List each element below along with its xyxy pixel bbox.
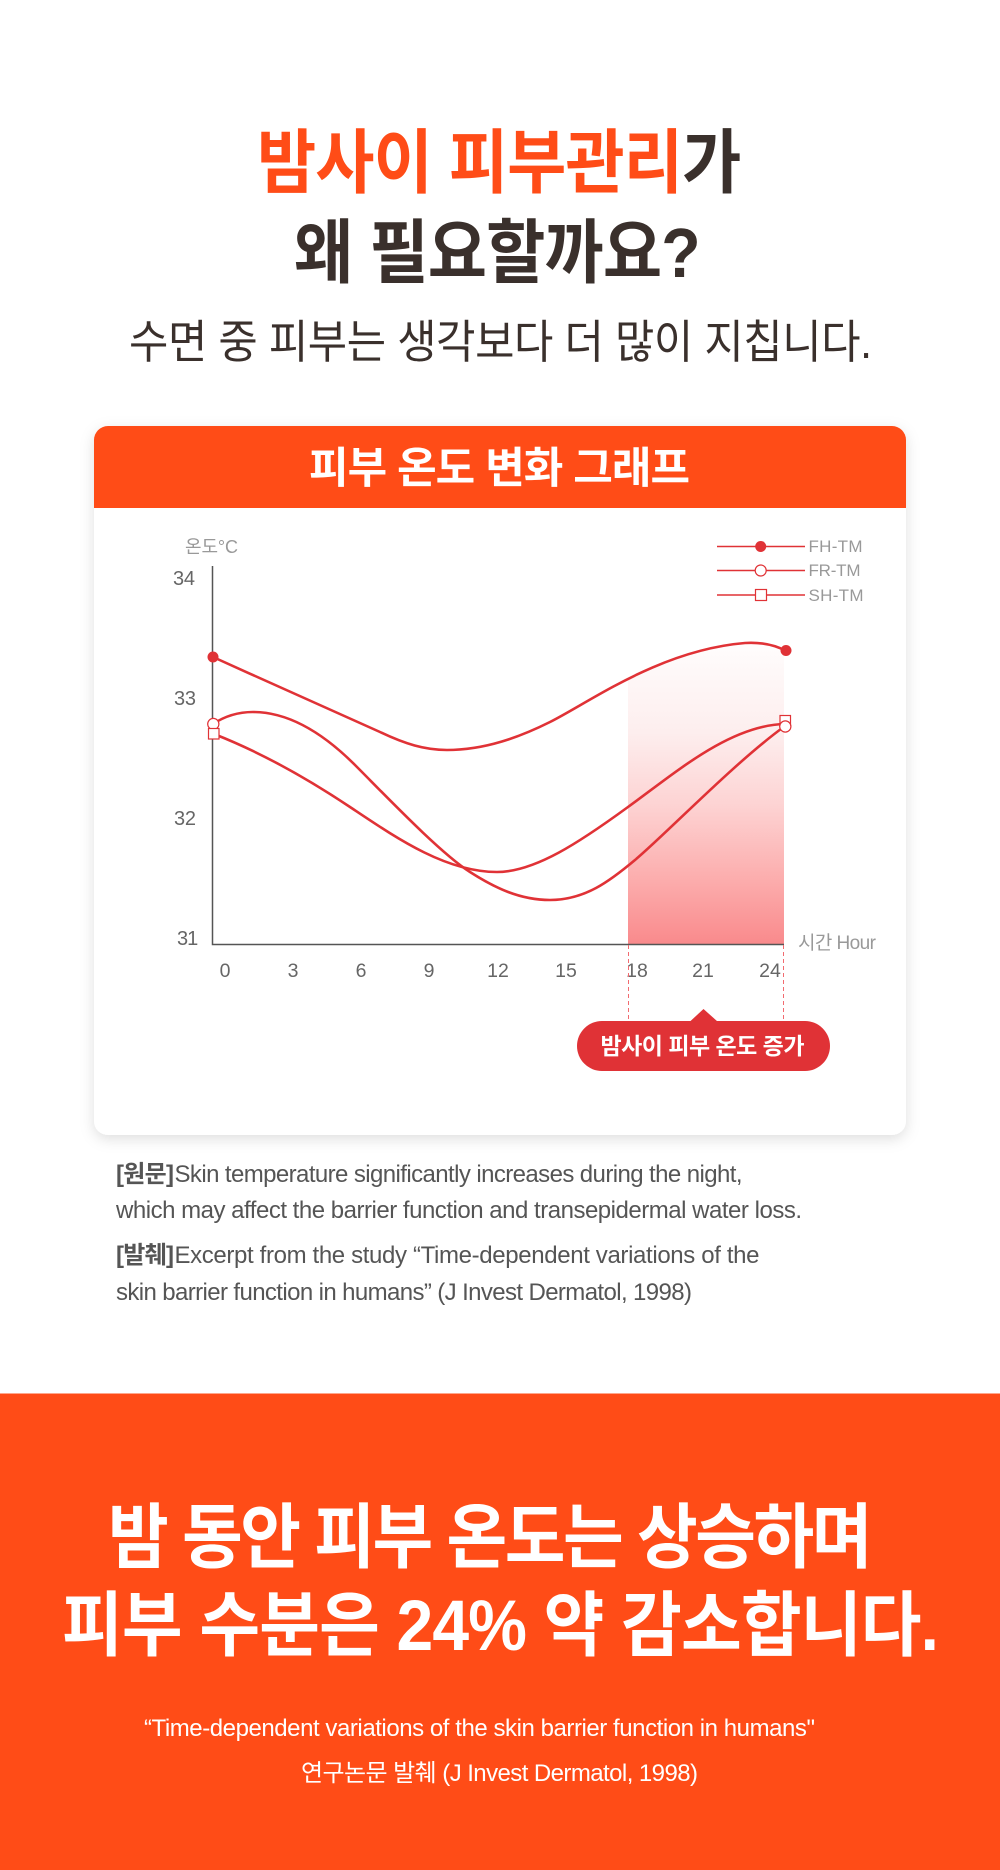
x axis labels: 24 xyxy=(759,960,781,982)
legend: FH-TM xyxy=(808,537,862,556)
source notes xyxy=(115,1161,802,1306)
conclusion heading xyxy=(62,1498,939,1666)
x axis labels: 0 xyxy=(220,960,231,982)
legend xyxy=(717,537,864,605)
title: 가 xyxy=(682,125,741,203)
source notes: [원문] xyxy=(116,1161,174,1188)
x axis labels xyxy=(220,960,781,982)
source notes: Skin temperature significantly increases during the night, xyxy=(174,1161,742,1188)
callout: night skin temperature increase xyxy=(577,1009,830,1071)
curve: FH-TM xyxy=(208,643,792,750)
x axis labels: 18 xyxy=(626,960,648,982)
legend: SH-TM xyxy=(808,586,864,605)
x axis title: 시간 Hour xyxy=(798,932,877,954)
y axis labels: 33 xyxy=(174,688,196,710)
citation: 연구논문 발췌 (J Invest Dermatol, 1998) xyxy=(301,1760,698,1787)
citation xyxy=(144,1715,815,1787)
x axis labels: 3 xyxy=(288,960,298,982)
y axis labels: 34 xyxy=(173,568,195,590)
curve: FR-TM xyxy=(208,712,791,900)
card header: 피부 온도 변화 그래프 xyxy=(309,445,690,493)
subtitle: 수면 중 피부는 생각보다 더 많이 지칩니다. xyxy=(129,318,872,368)
y axis title: 온도°C xyxy=(185,537,238,557)
source notes: skin barrier function in humans” (J Invest Dermatol, 1998) xyxy=(116,1279,692,1306)
source notes: [발췌] xyxy=(116,1242,174,1269)
x axis labels: 12 xyxy=(487,960,509,982)
marker: SH-TM start xyxy=(208,728,219,739)
curve: SH-TM xyxy=(214,716,790,872)
line chart xyxy=(173,537,877,1071)
y axis labels xyxy=(173,568,198,950)
x axis labels: 15 xyxy=(555,960,577,982)
source notes: Excerpt from the study “Time-dependent variations of the xyxy=(174,1242,760,1269)
dashed guides xyxy=(628,945,784,1021)
card background xyxy=(94,426,906,1135)
axes xyxy=(212,566,784,944)
card header xyxy=(94,426,906,508)
conclusion heading: 피부 수분은 24% 약 감소합니다. xyxy=(62,1586,939,1666)
citation: “Time-dependent variations of the skin barrier function in humans" xyxy=(144,1715,815,1742)
callout: night skin temperature increase: 밤사이 피부 온도 증가 xyxy=(600,1033,804,1059)
x axis labels: 21 xyxy=(692,960,714,982)
y axis labels: 31 xyxy=(177,928,198,950)
source notes: which may affect the barrier function and transepidermal water loss. xyxy=(115,1197,802,1224)
title: 왜 필요할까요? xyxy=(294,215,701,293)
x axis labels: 9 xyxy=(424,960,434,982)
conclusion heading: 밤 동안 피부 온도는 상승하며 xyxy=(108,1498,872,1578)
title: 밤사이 피부관리 xyxy=(257,125,683,203)
title xyxy=(257,125,741,293)
shaded area: night hours xyxy=(628,642,784,944)
panel: graph card xyxy=(94,426,906,1135)
x axis labels: 6 xyxy=(356,960,366,982)
legend: FR-TM xyxy=(808,561,860,580)
panel: conclusion band xyxy=(0,1394,1000,1870)
y axis labels: 32 xyxy=(174,808,196,830)
